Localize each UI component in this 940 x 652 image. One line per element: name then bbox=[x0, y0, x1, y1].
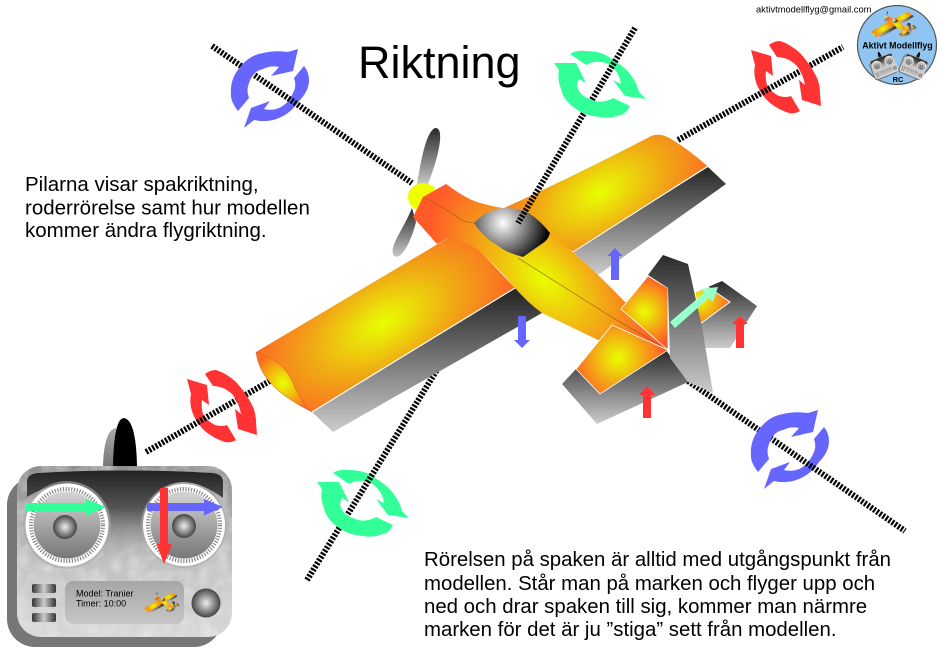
text block: arrows explanation: kommer ändra flygriktning. bbox=[25, 219, 267, 242]
airplane bbox=[256, 128, 757, 432]
logo name: Aktivt Modellflyg bbox=[862, 40, 933, 50]
text block: arrows explanation: roderrörelse samt hur modellen bbox=[25, 196, 310, 220]
text block: stick direction explanation: modellen. Står man på marken och flyger upp och bbox=[424, 573, 875, 595]
axis: roll, upper-left segment with blue rotation icon bbox=[212, 46, 412, 183]
arrow: elevator right up bbox=[732, 316, 748, 348]
axis: yaw, lower segment with green rotation icon bbox=[307, 365, 440, 580]
logo caption: RC bbox=[893, 75, 904, 84]
email address: aktivtmodellflyg@gmail.com bbox=[756, 4, 872, 14]
axis: roll, lower-right segment with blue rotation icon bbox=[688, 381, 905, 531]
text block: stick direction explanation: ned och drar spaken till sig, kommer man närmre bbox=[424, 596, 867, 618]
logo airplane bbox=[872, 11, 917, 39]
icon: miniature airplane bbox=[144, 592, 180, 614]
arrow: elevator left up bbox=[639, 386, 655, 418]
arrow: left aileron down bbox=[514, 316, 530, 348]
transmitter display text: Model: Tranier bbox=[76, 588, 134, 598]
axis: pitch, upper-right segment with red rotation icon bbox=[678, 41, 843, 140]
axis: yaw, upper segment with green rotation icon bbox=[518, 28, 646, 223]
arrow: rudder movement bbox=[670, 287, 718, 328]
radio transmitter bbox=[7, 418, 232, 647]
arrow: right stick right bbox=[147, 499, 223, 516]
arrow: left stick right bbox=[26, 499, 106, 516]
text block: stick direction explanation: Rörelsen på spaken är alltid med utgångspunkt från bbox=[424, 549, 891, 571]
logo transmitter right bbox=[897, 47, 931, 81]
logo transmitter left bbox=[866, 47, 900, 81]
transmitter display text: Timer: 10:00 bbox=[76, 598, 126, 608]
arrow: right stick down bbox=[156, 488, 172, 564]
title: Riktning bbox=[358, 37, 521, 88]
text block: stick direction explanation: marken för det är ju ”stiga” sett från modellen. bbox=[424, 619, 837, 641]
arrow: right aileron up bbox=[608, 248, 622, 280]
text block: arrows explanation: Pilarna visar spakriktning, bbox=[25, 173, 259, 196]
axis: pitch, lower-left segment with red rotation icon bbox=[146, 370, 275, 452]
logo badge bbox=[858, 6, 936, 84]
